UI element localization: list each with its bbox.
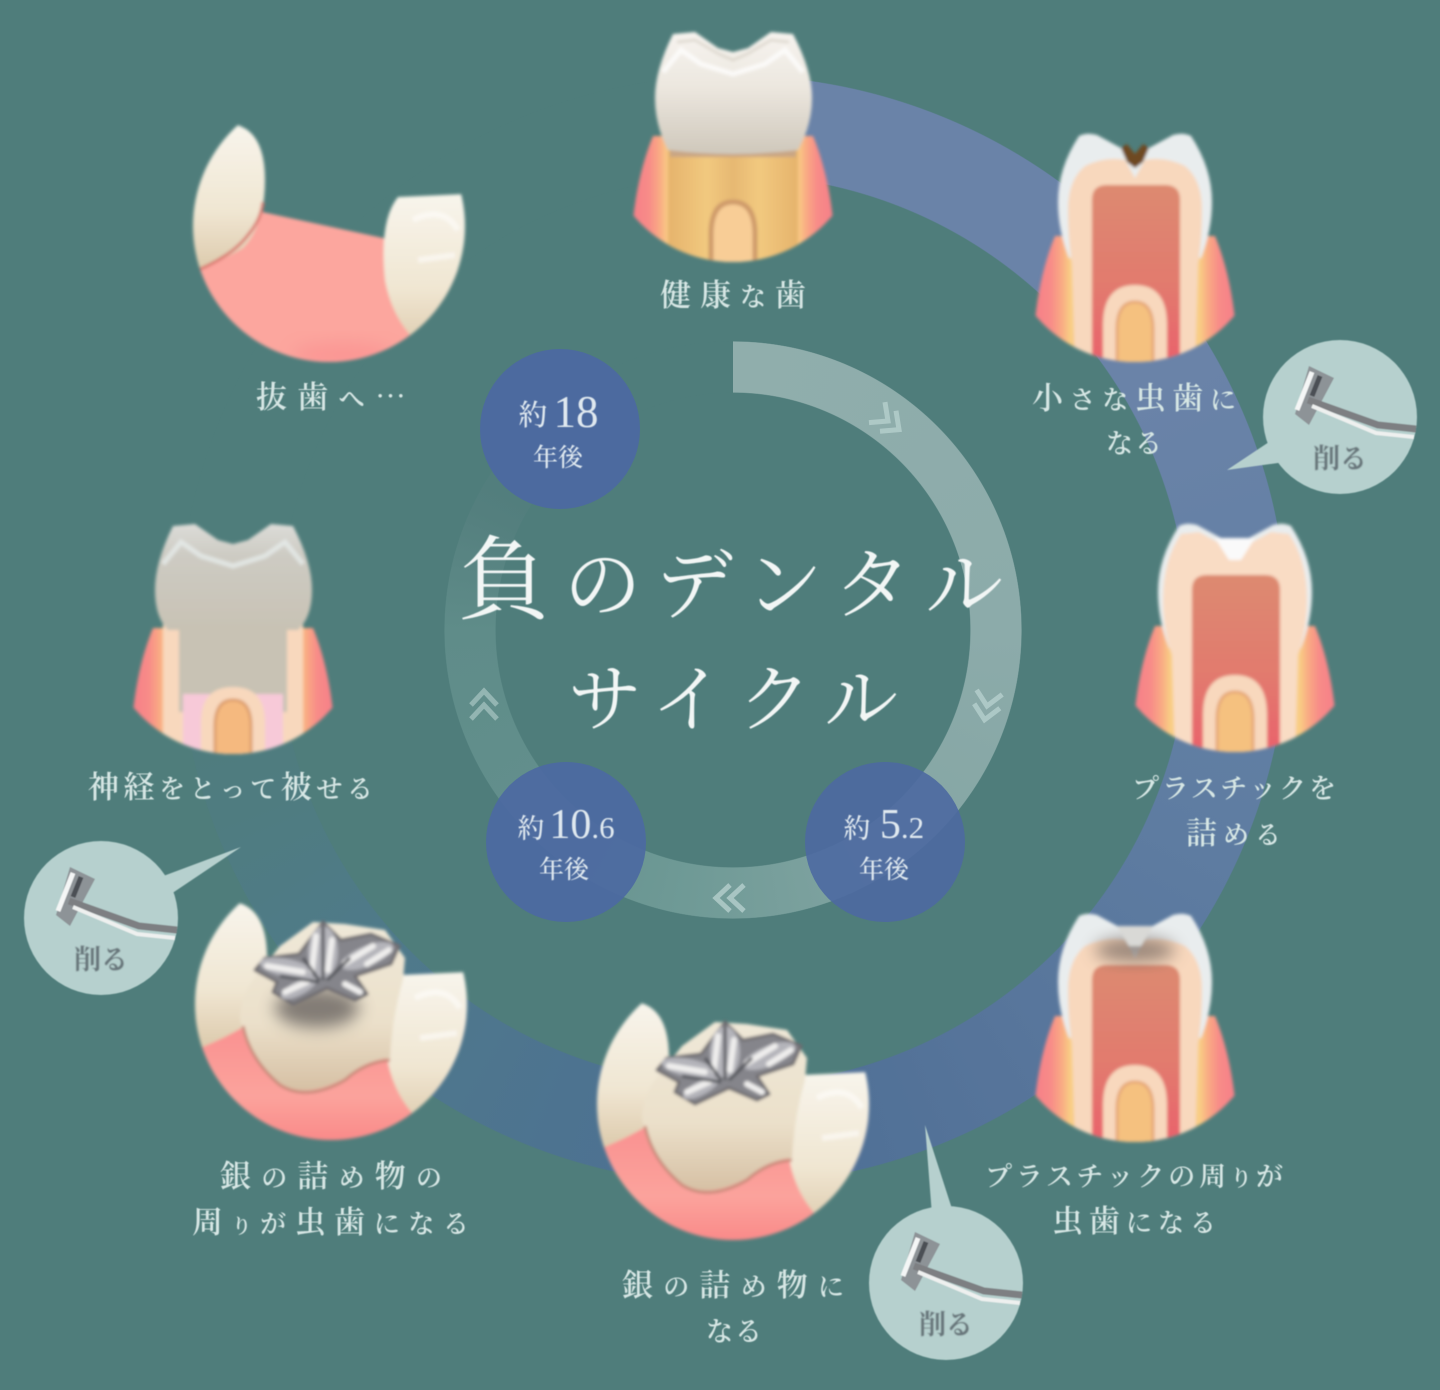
label: fill with plastic: 詰める [1186,816,1281,851]
label: becomes a small cavity: 小 さな虫歯 に [1032,381,1236,416]
callout: cut (bottom): 削る [919,1310,973,1340]
time badge: about 10.6 years later: 10.6 [549,802,615,848]
time badge: about 18 years later: 約 [518,399,548,432]
label: healthy tooth: 健康 な 歯 [660,278,806,313]
label: becomes a silver filling: なる [706,1317,762,1347]
icon: tooth with plastic filling [1135,524,1335,780]
icon: healthy tooth [633,32,833,290]
time badge: about 5.2 years later: 年後 [859,856,910,884]
icon: crowned tooth with nerve removed [133,524,333,782]
inner progress ring [444,341,1022,919]
callout: cut (right): 削る [1313,444,1367,474]
label: cavity around silver filling [192,1159,469,1240]
icon: cavity around plastic filling [1035,914,1235,1170]
label: cavity around silver filling: 銀 の 詰 め 物 の [220,1159,442,1194]
label: fill with plastic: プラスチックを [1132,774,1336,804]
label: becomes a silver filling [622,1268,844,1347]
icon: silver filling tooth [592,1002,882,1248]
time badge: about 10.6 years later: 約 [518,814,544,844]
time badge: about 5.2 years later [805,762,965,922]
time badge: about 10.6 years later: 年後 [539,856,590,884]
label: becomes a small cavity: なる [1106,429,1162,459]
time badge: about 18 years later [480,349,640,509]
label: cavity around plastic: プラスチックの周りが [985,1162,1283,1192]
time badge: about 18 years later: 年後 [533,444,584,472]
label: fill with plastic [1132,774,1336,851]
title: 負のデンタル [458,530,1003,632]
label: remove nerve and cap: 神経をとって被せる [88,770,373,805]
arrow: chevrons at left of ring [471,691,497,719]
label: cavity around silver filling: 周 り が 虫歯 になる [192,1205,469,1240]
callout: cut (left) [24,841,241,995]
label: cavity around plastic [985,1162,1283,1239]
time badge: about 10.6 years later [486,762,646,922]
arrow: chevrons at bottom of ring [716,885,744,911]
arrow: chevrons at upper right of ring [869,402,907,440]
time badge: about 5.2 years later: 約 [844,814,870,844]
callout: cut (left): 削る [74,945,128,975]
title: サイクル [568,660,898,742]
title [458,530,1003,742]
callout: cut (bottom) [869,1125,1023,1360]
label: cavity around plastic: 虫歯になる [1052,1204,1216,1239]
label: becomes a small cavity [1032,381,1236,459]
label: extraction: 抜歯 へ … [256,372,406,417]
label: becomes a silver filling: 銀 の 詰 め 物 に [622,1268,844,1303]
time badge: about 5.2 years later: 5.2 [880,802,924,848]
time badge: about 18 years later: 18 [554,387,598,437]
icon: extraction gap [188,124,483,370]
outer cycle ring band [178,75,1288,1185]
arrow: chevrons at right of ring [972,690,1002,722]
icon: cavity around silver filling [190,902,480,1148]
callout: cut (right) [1227,340,1417,494]
icon: tooth with small cavity [1035,134,1235,390]
